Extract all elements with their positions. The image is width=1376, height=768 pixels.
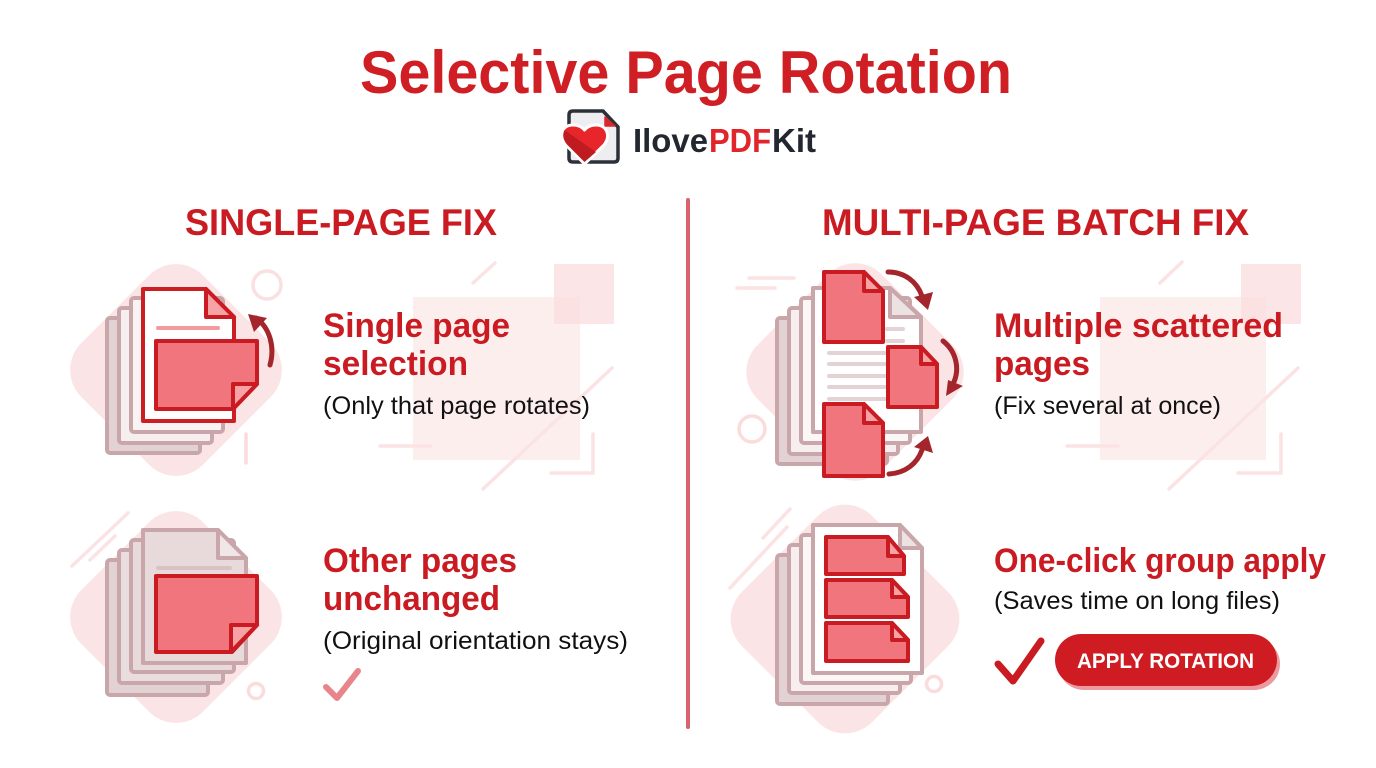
panel: one-click group apply [715, 489, 1326, 749]
logo: IlovePDFKit [562, 111, 816, 164]
arrow: rotation [248, 314, 272, 365]
panel: other pages unchanged [54, 495, 628, 739]
logo wordmark [633, 122, 816, 159]
icon: stack with three grouped pages [715, 489, 975, 749]
arrow: middle [943, 341, 963, 396]
text: one-click group apply: (Saves time on long files) [994, 587, 1280, 615]
icon: check mark [998, 641, 1041, 681]
text: single page selection: selection [323, 345, 468, 383]
icon: stack with three rotating pages [731, 248, 979, 496]
text: single page selection: (Only that page rotates) [323, 392, 590, 420]
background decoration: right panel [1067, 262, 1301, 489]
text: other pages unchanged: (Original orientation stays) [323, 627, 628, 655]
background decoration: left panel [380, 263, 614, 489]
icon: page stack, others unchanged [54, 495, 298, 739]
arrow: bottom [889, 436, 933, 474]
logo wordmark: PDF [709, 122, 771, 159]
text: one-click group apply: One-click group apply [994, 542, 1326, 580]
icon: page stack with one rotated page [54, 248, 298, 492]
text: other pages unchanged: unchanged [323, 580, 500, 618]
icon: light check mark [326, 671, 358, 698]
logo wordmark: Kit [772, 122, 816, 159]
panel: single page selection [54, 248, 590, 492]
heading: single-page fix: SINGLE-PAGE FIX [185, 202, 497, 243]
button: apply rotation [1055, 634, 1280, 690]
text: multiple scattered pages [994, 307, 1283, 420]
text: other pages unchanged [323, 542, 628, 655]
logo wordmark: Ilove [633, 122, 708, 159]
text: other pages unchanged: Other pages [323, 542, 517, 580]
heading: multi-page batch fix: MULTI-PAGE BATCH FIX [822, 202, 1249, 243]
panel: multiple scattered pages [731, 248, 1283, 496]
title: Selective Page Rotation [360, 39, 1012, 106]
icon: document with heart [562, 111, 618, 164]
arrow: top [888, 272, 933, 310]
center divider [686, 198, 690, 729]
button: apply rotation: APPLY ROTATION [1077, 650, 1254, 673]
text: single page selection [323, 307, 590, 420]
text: one-click group apply [994, 542, 1326, 615]
text: multiple scattered pages: Multiple scattered [994, 307, 1283, 345]
text: single page selection: Single page [323, 307, 510, 345]
text: multiple scattered pages: pages [994, 345, 1090, 383]
text: multiple scattered pages: (Fix several at once) [994, 392, 1221, 420]
